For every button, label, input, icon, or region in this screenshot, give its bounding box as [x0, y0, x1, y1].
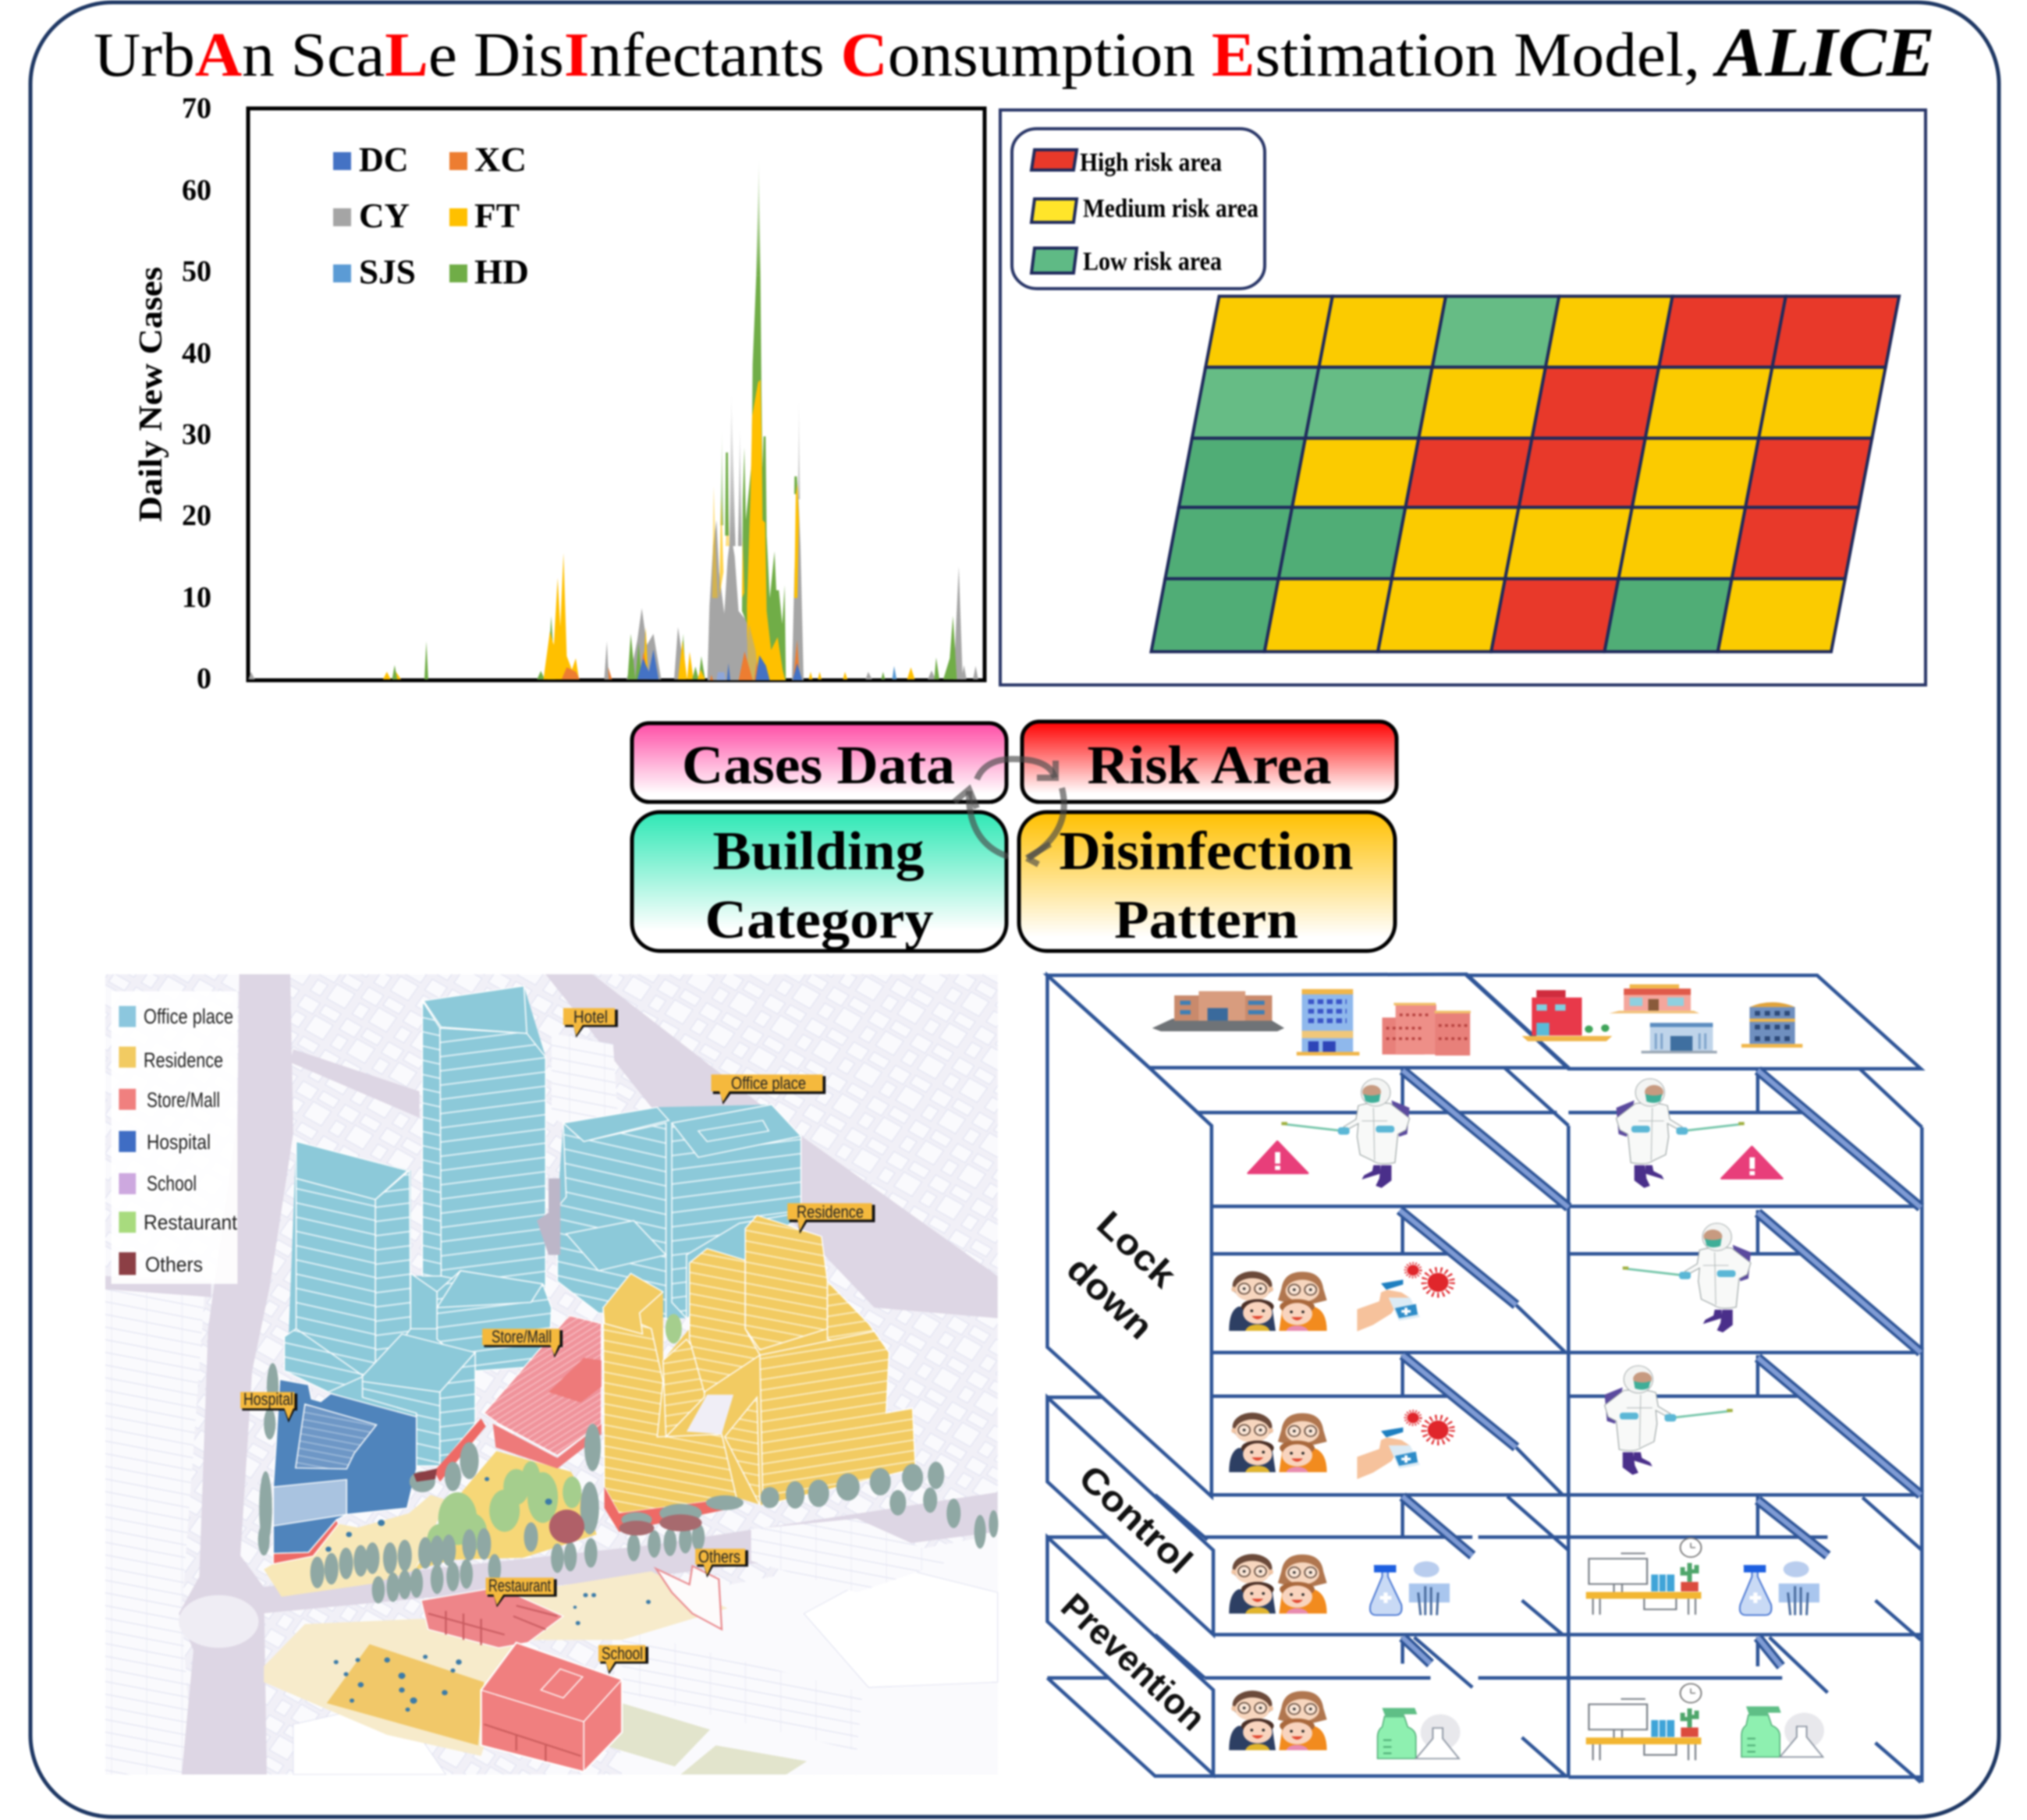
icon: hand spray row 3	[1357, 1411, 1452, 1479]
y axis numbers: 20	[182, 499, 211, 532]
stacked area series	[248, 156, 978, 680]
office towers	[287, 986, 552, 1466]
legend: HD	[474, 253, 529, 291]
icon: family row 2	[1229, 1272, 1327, 1331]
risk legend: High risk area	[1080, 148, 1222, 177]
y axis numbers: 0	[197, 662, 211, 695]
icon: tower	[1741, 1002, 1802, 1048]
label: lock down: down	[1060, 1248, 1161, 1347]
icon: hazmat sprayer row 1 left	[1281, 1079, 1410, 1188]
box: cases data	[632, 723, 1006, 802]
icon: hospital	[1642, 1023, 1717, 1053]
legend: CY	[359, 197, 410, 235]
y axis numbers: 40	[182, 337, 211, 370]
side walls	[1047, 975, 1212, 1496]
panel: daily new cases chart	[133, 92, 985, 695]
horizontal shelves	[1198, 1112, 1922, 1777]
map tag shapes	[240, 1008, 875, 1674]
center process boxes	[632, 722, 1397, 951]
box: disinfection pattern: Disinfection	[1060, 821, 1353, 882]
map legend labels: School	[147, 1172, 197, 1195]
ground and city blocks	[105, 974, 998, 1775]
icon: spray and wash row 4 right	[1740, 1561, 1819, 1615]
icon: warning row 1 right	[1722, 1147, 1782, 1179]
diagonals thin	[1149, 1068, 1922, 1783]
map tag labels: School	[602, 1644, 643, 1663]
legend swatches	[119, 1006, 136, 1275]
map legend labels: Residence	[144, 1048, 223, 1072]
box: building category	[632, 812, 1006, 951]
legend: FT	[474, 197, 520, 235]
icon: restaurant	[1610, 985, 1699, 1013]
cycle arrows	[954, 759, 1064, 864]
icon: desk row 4	[1586, 1538, 1701, 1615]
legend: XC	[474, 140, 527, 179]
store mall	[484, 1315, 602, 1456]
map legend labels: Store/Mall	[147, 1088, 220, 1112]
panel frame	[1000, 110, 1926, 685]
people dots	[325, 1477, 651, 1712]
map tag labels: Hospital	[243, 1389, 293, 1409]
icon: desk row 5	[1586, 1683, 1701, 1760]
icon: hand spray row 2	[1357, 1263, 1452, 1332]
map tag labels: Residence	[797, 1202, 864, 1222]
panel: disinfection pattern shelves	[1047, 974, 1922, 1783]
map legend labels: Office place	[144, 1005, 233, 1028]
map legend labels: Restaurant	[144, 1211, 237, 1234]
box: disinfection pattern	[1019, 812, 1395, 951]
icon: family row 3	[1229, 1413, 1327, 1472]
plazas	[264, 1495, 447, 1597]
icon: red apartments	[1383, 1002, 1471, 1055]
panel: risk area map	[1000, 110, 1926, 685]
icon: school building	[1152, 992, 1284, 1031]
y axis numbers: 70	[182, 92, 211, 125]
box: building category: Building	[713, 821, 924, 882]
legend: SJS	[359, 253, 416, 291]
central outbreak peak	[708, 156, 804, 680]
map legend labels	[144, 1005, 237, 1276]
title: ALICE	[1713, 14, 1935, 91]
residence blocks	[603, 1215, 915, 1513]
risk legend: Low risk area	[1083, 247, 1222, 276]
icon: red shop	[1522, 990, 1612, 1041]
hospital	[273, 1379, 417, 1564]
chart frame	[248, 108, 985, 680]
y axis numbers: 60	[182, 174, 211, 207]
icon: hazmat sprayer row 3 right	[1605, 1366, 1733, 1475]
y axis numbers: 30	[182, 418, 211, 451]
box: disinfection pattern: Pattern	[1114, 890, 1298, 950]
trees	[427, 1314, 682, 1556]
y axis title: Daily New Cases	[133, 267, 169, 522]
panel: building category map	[105, 974, 998, 1775]
map legend labels: Others	[145, 1253, 203, 1276]
map tag labels: Hotel	[573, 1007, 608, 1027]
icon: hazmat sprayer row 2 right	[1623, 1223, 1751, 1332]
icon: family row 4	[1229, 1554, 1327, 1613]
label: lock down	[1060, 1203, 1184, 1347]
legend	[333, 140, 529, 291]
verticals	[1403, 1068, 1922, 1783]
label: control: Control	[1071, 1457, 1201, 1581]
icon: blue hotel	[1297, 989, 1359, 1055]
icon: warning row 1 left	[1248, 1141, 1308, 1173]
box: cases data: Cases Data	[682, 736, 955, 796]
box: risk area: Risk Area	[1088, 736, 1331, 796]
thick diagonals	[1400, 1070, 1921, 1666]
white legend card background	[112, 992, 237, 1284]
icon: bottle and flask row 5 right	[1741, 1706, 1824, 1757]
box: risk area	[1022, 722, 1397, 802]
y axis numbers	[182, 92, 211, 695]
map tag labels: Others	[698, 1547, 740, 1566]
map tag labels: Store/Mall	[492, 1327, 552, 1346]
map tag labels: Restaurant	[488, 1576, 551, 1595]
roads	[105, 974, 998, 1775]
box: building category: Category	[705, 890, 933, 950]
risk legend	[1012, 129, 1265, 289]
icon: spray and wash row 4 left	[1370, 1561, 1450, 1615]
others building	[656, 1566, 722, 1630]
icon: bottle and flask row 5 left	[1378, 1708, 1461, 1758]
school building	[481, 1643, 622, 1772]
label: lock down: Lock	[1089, 1203, 1184, 1296]
top planes	[1047, 974, 1568, 1068]
y axis numbers: 10	[182, 581, 211, 614]
map legend labels: Hospital	[147, 1130, 211, 1154]
map tag labels	[243, 1007, 864, 1663]
label: prevention: Prevention	[1053, 1585, 1213, 1738]
icon: family row 5	[1229, 1691, 1327, 1750]
y axis numbers: 50	[182, 255, 211, 288]
risk grid	[1151, 296, 1899, 651]
map tag labels: Office place	[731, 1073, 806, 1093]
title: UrbAn ScaLe DisInfectants Consumption Estimation Model,	[94, 21, 1700, 90]
shelf wireframe	[1047, 974, 1922, 1783]
legend: DC	[359, 140, 409, 179]
icon: hazmat sprayer row 1 right	[1617, 1079, 1745, 1188]
risk legend: Medium risk area	[1083, 194, 1258, 223]
building icons on top plane	[1152, 985, 1802, 1055]
restaurant building	[421, 1588, 563, 1648]
lower-right white campus	[610, 1534, 998, 1775]
